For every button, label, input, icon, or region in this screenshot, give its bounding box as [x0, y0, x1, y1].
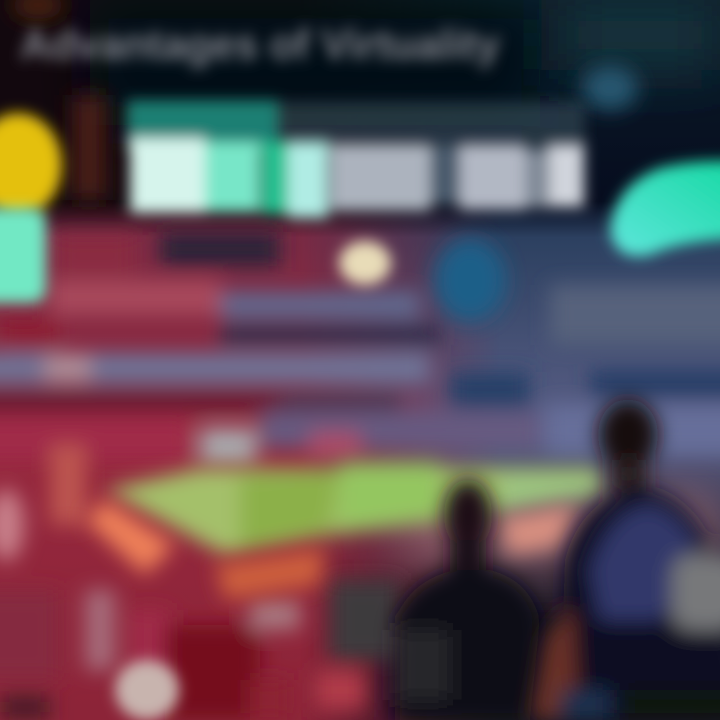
crowd left	[50, 445, 86, 525]
spectator silhouette: right	[530, 399, 720, 720]
left yellow screen	[0, 113, 62, 217]
white spectator highlight	[115, 660, 179, 720]
light flare	[339, 241, 391, 285]
spectator silhouette: centre	[395, 479, 540, 720]
blue centre panel	[434, 238, 506, 322]
right teal screen	[610, 161, 720, 256]
orange track	[85, 500, 575, 600]
stands bands	[0, 232, 720, 464]
scoreboard screen	[125, 100, 585, 218]
green pitch	[105, 462, 600, 555]
title: Advantages of Virtuality	[20, 21, 500, 69]
left teal screen	[0, 208, 46, 303]
